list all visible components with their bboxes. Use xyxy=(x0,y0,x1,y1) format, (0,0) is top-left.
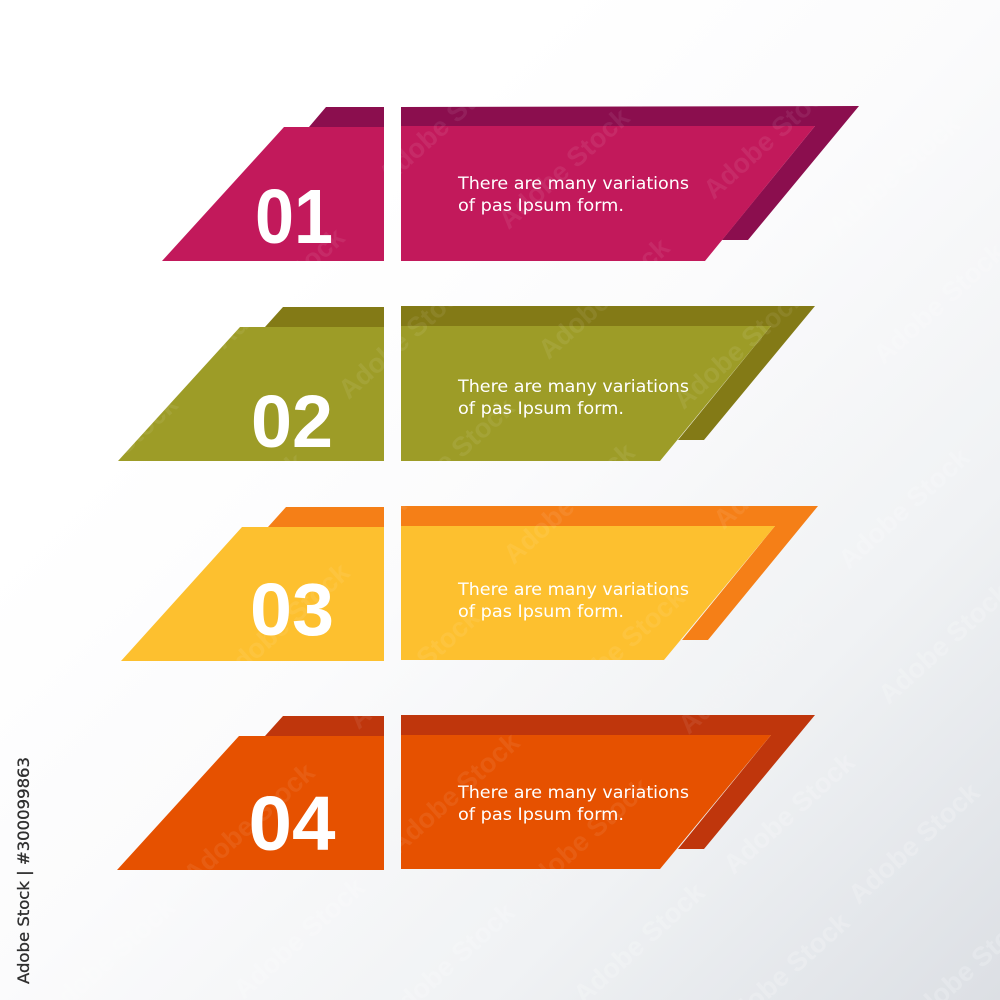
row 3 number: 03 xyxy=(250,568,334,651)
row 3 back shape right xyxy=(401,506,818,640)
stock credit vertical text: Adobe Stock | #300099863 xyxy=(14,757,33,984)
row 4 back shape left xyxy=(265,716,384,736)
row 1 text: of pas Ipsum form. xyxy=(458,196,624,216)
watermark pattern: Adobe Stock xyxy=(498,436,641,570)
row 2 back shape right xyxy=(401,306,815,440)
watermark pattern: Adobe Stock xyxy=(823,108,966,242)
row 4 text: There are many variations xyxy=(457,783,689,803)
row 2: olive step xyxy=(118,306,815,463)
watermark pattern: Adobe Stock xyxy=(668,281,811,415)
row 3 text: of pas Ipsum form. xyxy=(458,602,624,622)
watermark pattern: Adobe Stock xyxy=(673,606,816,740)
row 2 front shape right xyxy=(401,326,771,461)
watermark pattern: Adobe Stock xyxy=(33,48,176,182)
watermark pattern: Adobe Stock xyxy=(53,711,196,845)
row 1 back shape left xyxy=(309,107,384,127)
row 3 front shape right xyxy=(401,526,775,660)
row 2 back shape left xyxy=(265,307,384,327)
row 1 front shape right xyxy=(401,126,815,261)
row 4 back shape right xyxy=(401,715,815,849)
watermark pattern: Adobe Stock xyxy=(708,401,851,535)
watermark pattern: Adobe Stock xyxy=(493,101,636,235)
row 2 text: of pas Ipsum form. xyxy=(458,399,624,419)
row 1 text: There are many variations xyxy=(457,174,689,194)
row 1: magenta step xyxy=(162,106,859,261)
row 3 back shape left xyxy=(268,507,384,527)
watermark pattern: Adobe Stock xyxy=(0,251,141,385)
row 3 front shape left xyxy=(121,527,384,661)
row 2 text: There are many variations xyxy=(457,377,689,397)
watermark pattern: Adobe Stock xyxy=(718,746,861,880)
row 3: yellow step xyxy=(121,506,818,661)
watermark pattern: Adobe Stock xyxy=(208,221,351,355)
row 4 front shape left xyxy=(117,736,384,870)
watermark pattern: Adobe Stock xyxy=(833,441,976,575)
watermark pattern: Adobe Stock xyxy=(178,756,321,890)
watermark pattern: Adobe Stock xyxy=(41,388,184,522)
row 1 back shape right xyxy=(401,106,859,240)
row 1 number: 01 xyxy=(255,174,333,260)
watermark pattern: Adobe Stock xyxy=(378,391,521,525)
watermark pattern: Adobe Stock xyxy=(158,96,301,230)
watermark pattern: Adobe Stock xyxy=(343,601,486,735)
watermark pattern: Adobe Stock xyxy=(533,231,676,365)
watermark pattern: Adobe Stock xyxy=(383,726,526,860)
watermark pattern: Adobe Stock xyxy=(168,446,311,580)
watermark pattern: Adobe Stock xyxy=(513,771,656,905)
row 3 text: There are many variations xyxy=(457,580,689,600)
watermark pattern: Adobe Stock xyxy=(843,776,986,910)
watermark pattern: Adobe Stock xyxy=(373,56,516,190)
row 4 number: 04 xyxy=(248,781,336,867)
watermark pattern: Adobe Stock xyxy=(213,556,356,690)
watermark pattern: Adobe Stock xyxy=(698,71,841,205)
row 2 number: 02 xyxy=(251,380,333,463)
row 1 front shape left xyxy=(162,127,384,261)
watermark pattern: Adobe Stock xyxy=(8,581,151,715)
row 4 text: of pas Ipsum form. xyxy=(458,805,624,825)
row 2 front shape left xyxy=(118,327,384,461)
row 4 front shape right xyxy=(401,735,771,869)
watermark pattern: Adobe Stock xyxy=(333,271,476,405)
watermark pattern: Adobe Stock xyxy=(548,581,691,715)
row 4: orange step xyxy=(117,715,815,870)
